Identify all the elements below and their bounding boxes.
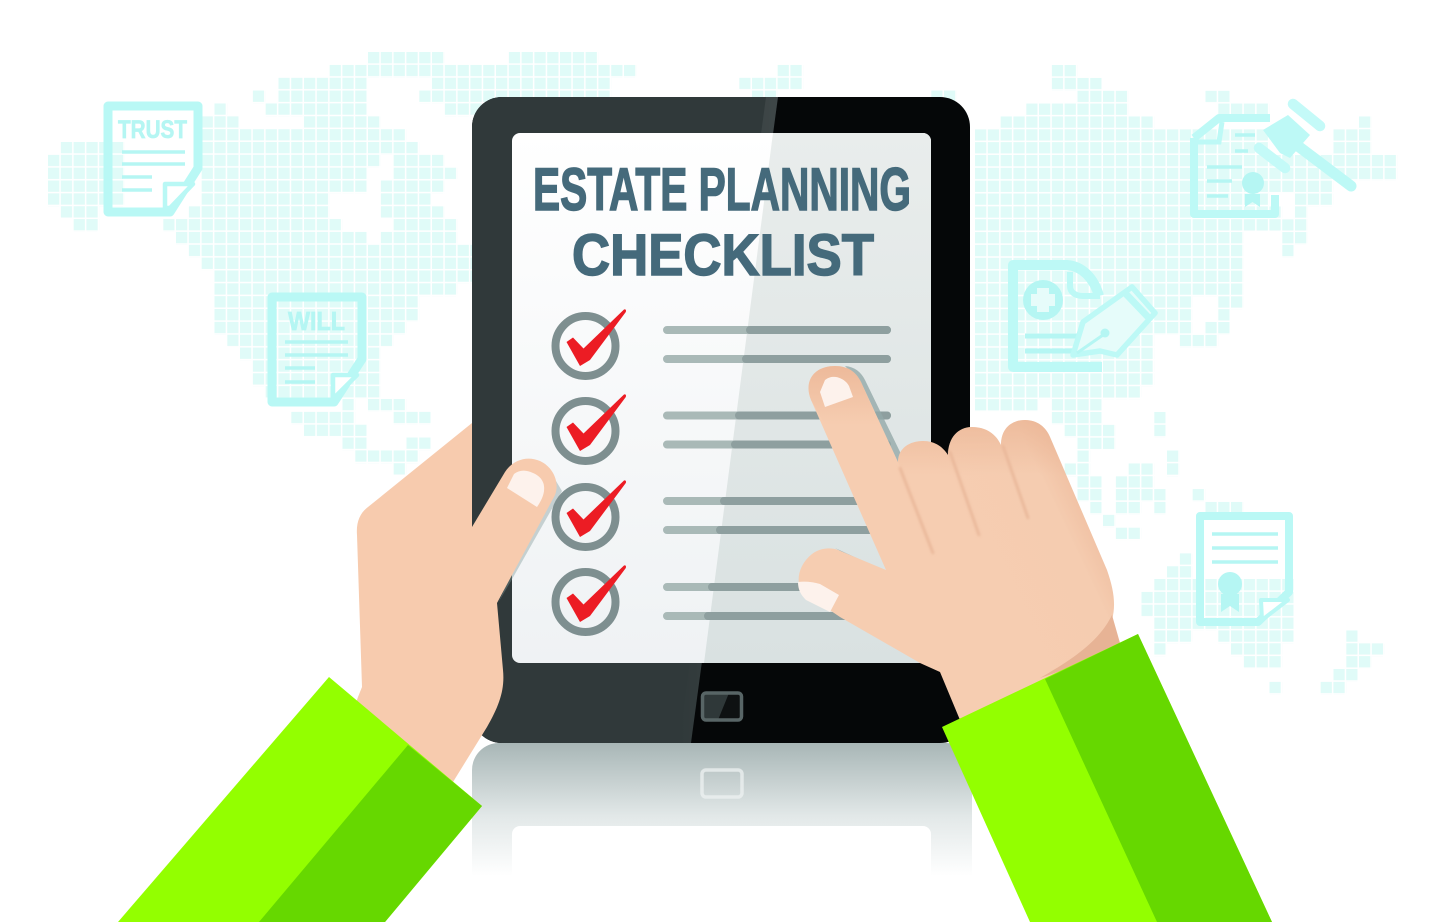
checklist row 2 [556,394,887,461]
icon: trust document: TRUST [118,116,187,144]
home button [702,693,742,720]
thumb nail [507,471,544,507]
right hand pointing [798,366,1125,720]
title [533,156,911,288]
checklist row 1 [556,309,887,376]
icon: will document: WILL [288,306,345,336]
title: CHECKLIST [572,223,874,288]
checklist row 4 [556,565,887,632]
left hand holding tablet [350,423,557,782]
finger shadows on screen [498,366,902,603]
checklist row 3 [556,480,887,547]
right sleeve [942,634,1272,922]
tablet reflection [472,743,972,878]
tablet body [472,97,970,743]
background world map right: dotted continents [975,65,1397,695]
left sleeve [118,677,482,922]
icon: legal document with gavel [1194,104,1351,214]
background world map left: dotted continents [48,52,957,476]
icon: will document [272,297,362,402]
shaded part of list lines under screen glare [708,330,887,616]
icon: certificate document [1200,516,1289,622]
icon: trust document [108,106,198,212]
title: ESTATE PLANNING [533,156,911,223]
icon: medical document with pen [1013,265,1155,367]
index finger nail [820,377,853,407]
thumb nail [798,582,839,612]
tablet screen [512,133,940,663]
